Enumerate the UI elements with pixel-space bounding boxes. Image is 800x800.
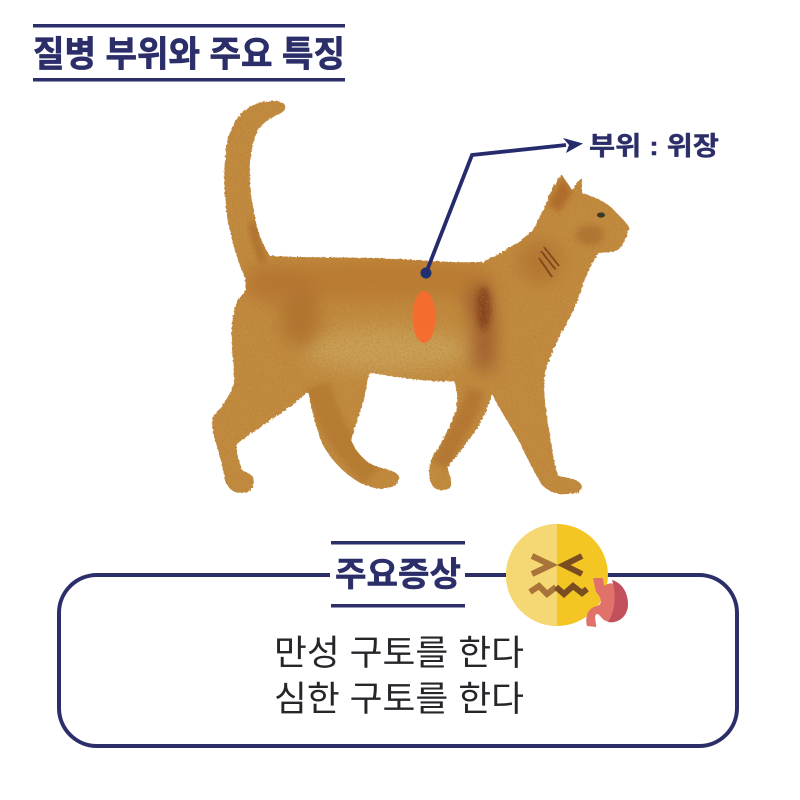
shading: far legs — [318, 385, 372, 475]
shading: shoulder shadow — [464, 280, 494, 372]
text: symptoms: 만성 구토를 한다 — [274, 634, 524, 673]
shading: head — [576, 225, 604, 245]
shading: ear — [548, 177, 572, 212]
shading: neck stripes — [539, 247, 559, 277]
shading: rump — [242, 265, 302, 301]
cat eye — [597, 212, 605, 218]
shading: pale belly — [300, 328, 470, 372]
shading: neck — [518, 240, 562, 284]
title: 질병 부위와 주요 특징: 질병 부위와 주요 특징 — [33, 34, 345, 74]
text: symptoms: 심한 구토를 한다 — [274, 680, 524, 719]
shading: haunch stripe — [280, 276, 320, 348]
text: symptoms — [274, 634, 524, 719]
icon: stomach — [586, 578, 628, 627]
label: location: 부위 : 위장 — [589, 131, 719, 161]
arrow: location pointer — [420, 138, 583, 278]
icon: nauseous face with stomach — [506, 524, 628, 627]
shading: upper back — [275, 260, 495, 300]
heading: main symptoms: 주요증상 — [335, 556, 461, 594]
fur grain — [205, 95, 635, 500]
panel: main symptoms — [59, 541, 737, 746]
title: 질병 부위와 주요 특징 — [33, 24, 345, 82]
cat illustration — [205, 95, 635, 500]
heading: main symptoms — [331, 541, 465, 608]
shading: tail base — [252, 222, 263, 262]
stomach highlight on cat — [412, 291, 436, 343]
